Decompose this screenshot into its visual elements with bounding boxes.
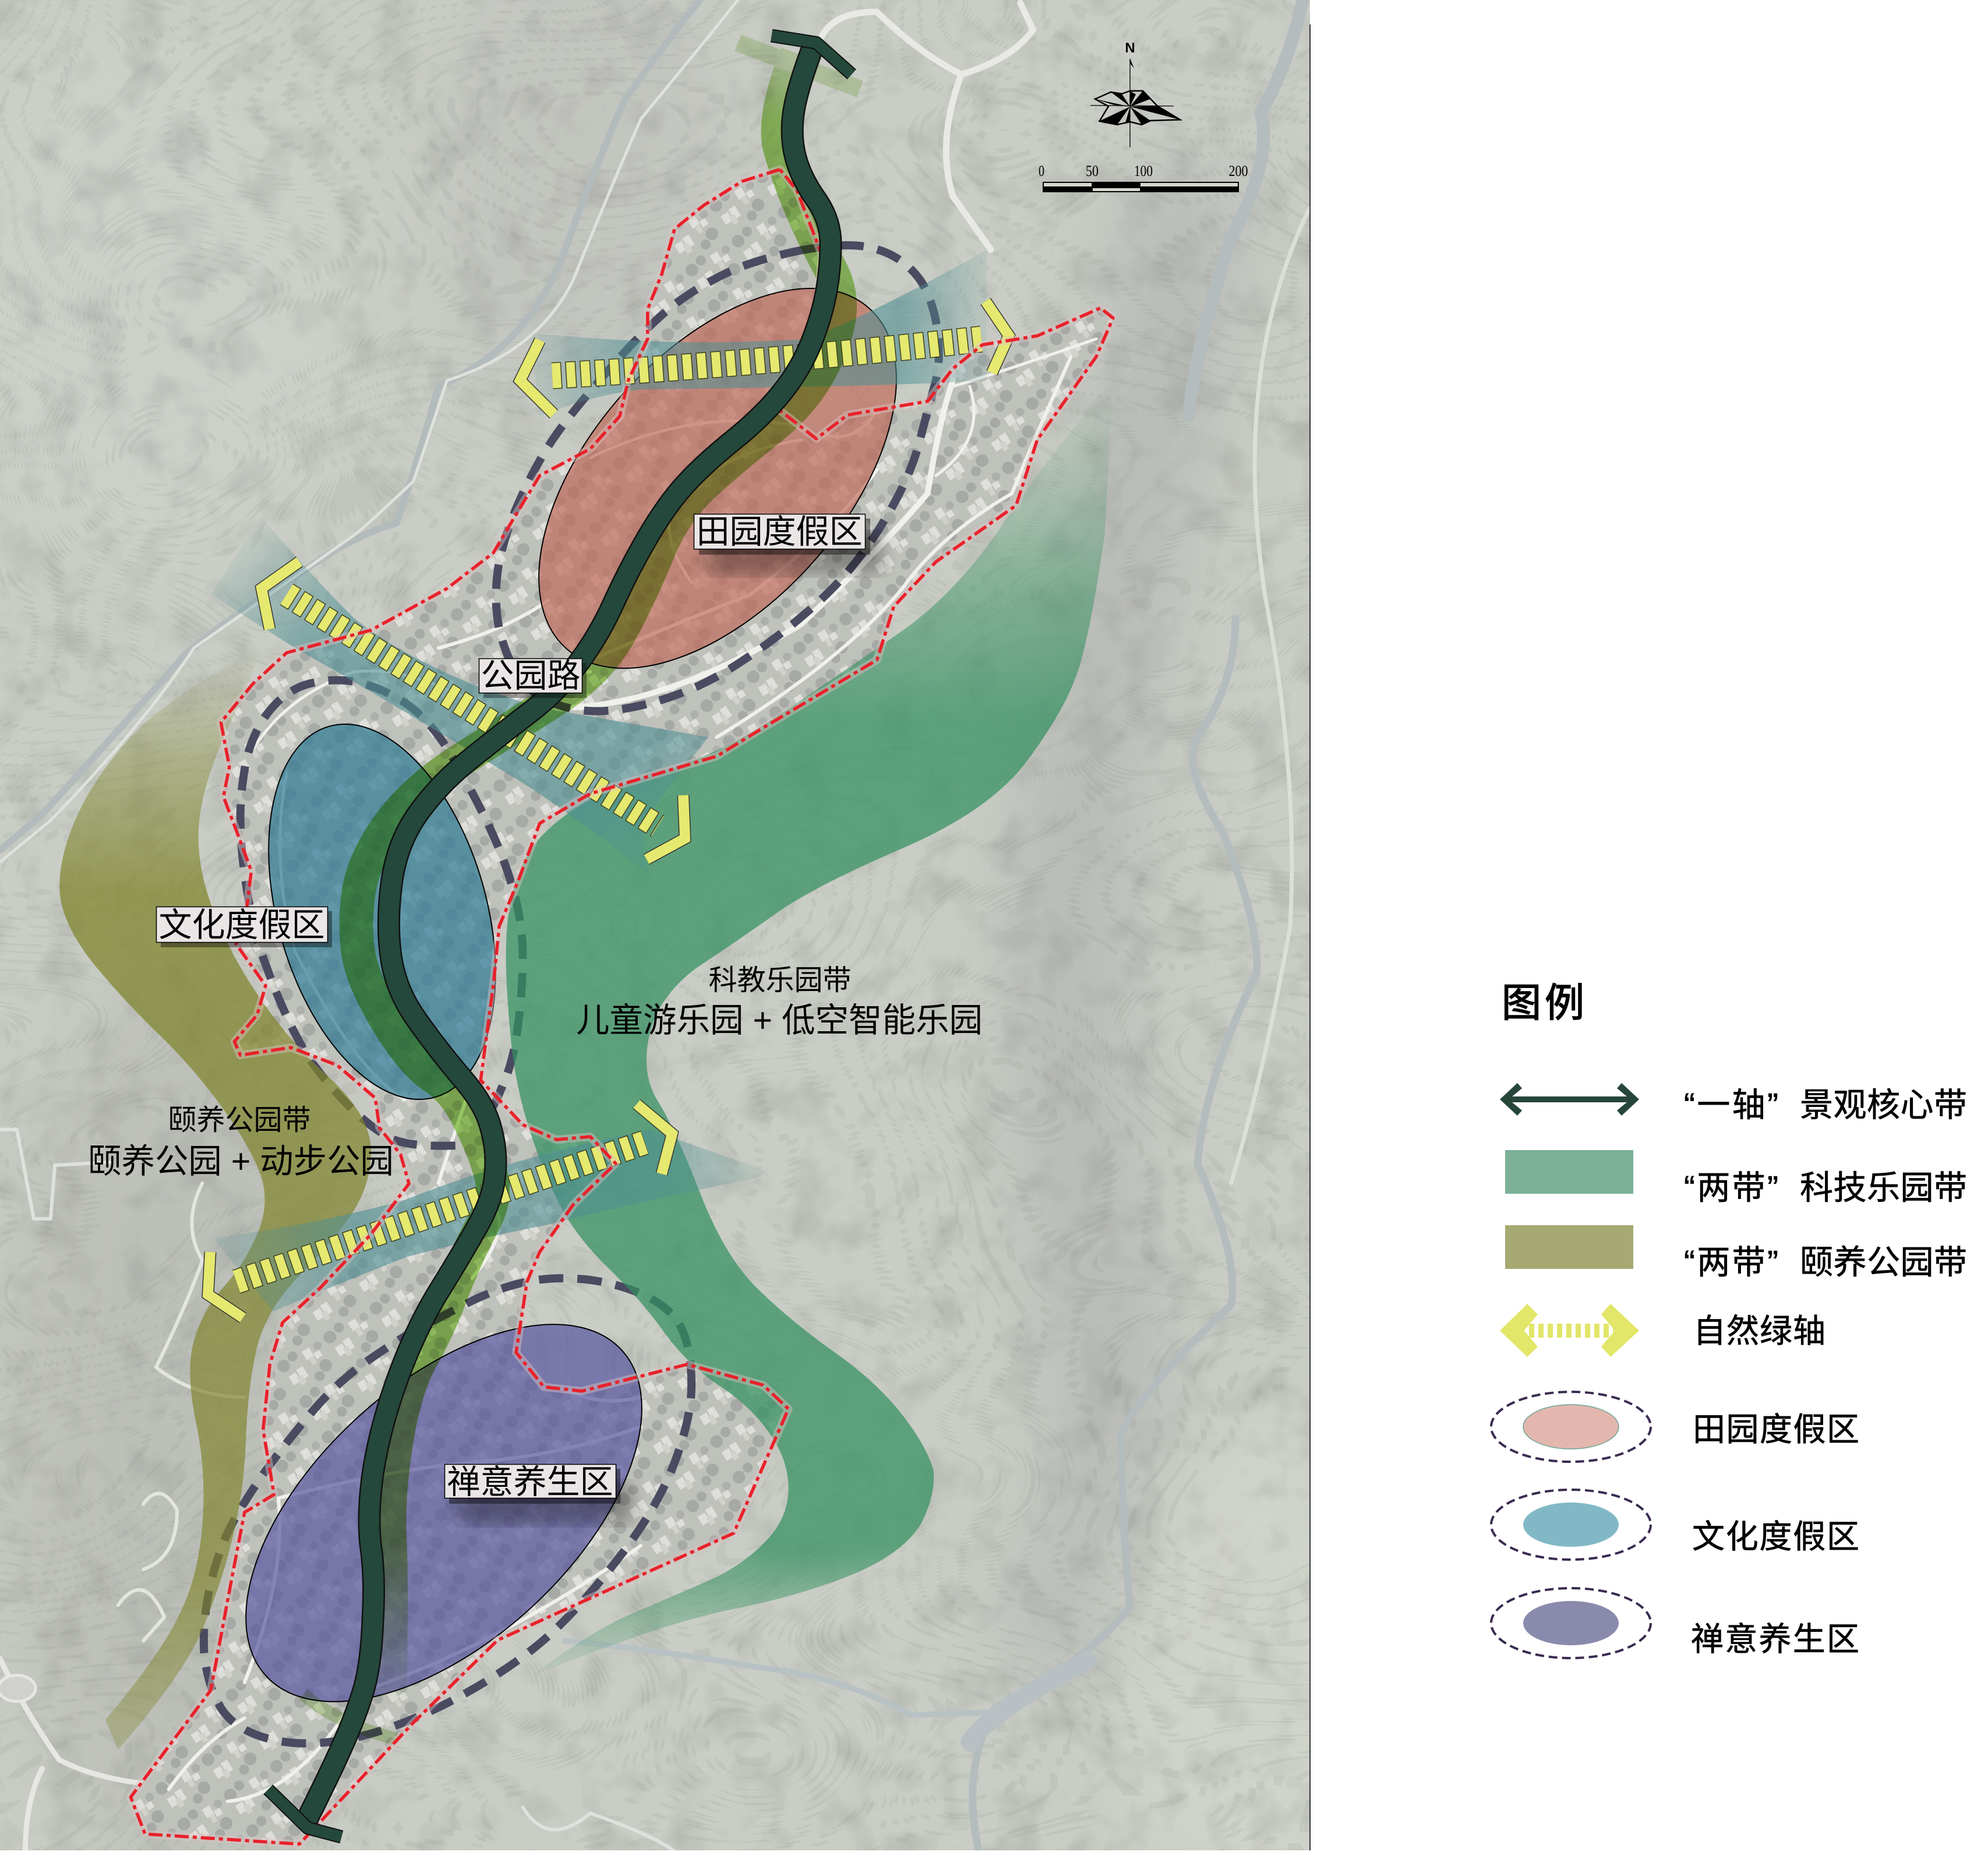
zone outline: culture resort [241,680,523,1146]
legend: axis label: “一轴” [1684,1087,1778,1124]
label: 禅意养生区: 禅意养生区 [447,1463,613,1501]
legend: axis arrow [1500,1083,1639,1116]
natural green axes: striped bars and chevrons [208,301,1009,1318]
text: science and education belt annotation [576,965,983,1039]
panel: base terrain map [0,0,1404,1855]
legend: science park label: 科技乐园带 [1800,1169,1967,1207]
legend: wellness park label: “两带” [1684,1244,1778,1281]
legend: pastoral resort icon [1491,1392,1651,1462]
label: 田园度假区: 田园度假区 [697,513,862,551]
ellipse: pastoral resort [471,224,964,733]
scale bar: 200 [1229,163,1248,179]
label: 田园度假区 [694,513,882,574]
green axis: north [520,301,1009,414]
legend: natural green axis icon [1500,1304,1639,1357]
legend title: 图例 [1502,981,1584,1025]
red site boundary [130,170,1113,1844]
teal cross corridors [211,250,987,1311]
scale bar: 0 [1039,163,1044,179]
dashed zone outlines [204,245,939,1743]
label: 公园路: 公园路 [481,657,580,694]
label: 禅意养生区 [445,1463,632,1524]
green axis: south [208,1104,672,1318]
legend: zen wellness icon [1491,1588,1651,1658]
scale bar: 50 [1086,163,1099,179]
legend: wellness park label [1684,1244,1967,1281]
legend: wellness park swatch [1505,1225,1633,1269]
legend: culture resort icon [1491,1490,1651,1560]
ellipse: zen wellness [179,1255,709,1771]
ellipse: culture resort [229,697,535,1126]
legend: science park swatch [1505,1150,1633,1194]
band: science and education park belt [506,380,1113,1677]
panel: legend [1491,981,1967,1658]
text: wellness belt annotation [88,1105,394,1180]
icon: north arrow and wind rose: N [1125,40,1135,56]
green corridor along the axis [303,43,860,1739]
text: wellness belt annotation: 颐养公园带 [168,1105,311,1136]
text: science and education belt annotation: 儿童游乐园 + 低空智能乐园 [576,1001,983,1039]
main landscape axis with arrowheads [268,36,852,1837]
green axis: middle [262,562,685,859]
zone outline: pastoral resort [496,245,939,711]
legend: science park label [1684,1169,1967,1207]
zone outline: zen wellness [204,1278,691,1743]
text: wellness belt annotation: 颐养公园 + 动步公园 [88,1142,394,1180]
legend: pastoral resort label: 田园度假区 [1693,1411,1859,1448]
legend: natural green axis label: 自然绿轴 [1693,1313,1825,1349]
legend: culture resort label: 文化度假区 [1692,1518,1859,1555]
rivers and outer roads [0,0,1309,1852]
icon: north arrow and wind rose [1090,40,1180,147]
label: 文化度假区: 文化度假区 [158,907,325,944]
band: wellness park belt [59,648,371,1750]
scale bar [1039,163,1248,192]
scale bar: 100 [1134,163,1153,179]
legend: axis label [1684,1087,1967,1124]
legend: wellness park label: 颐养公园带 [1800,1244,1967,1281]
legend: science park label: “两带” [1684,1169,1778,1207]
text: science and education belt annotation: 科教乐园带 [708,965,852,996]
map right edge line [1309,24,1311,1850]
legend: zen wellness label: 禅意养生区 [1691,1621,1859,1657]
legend: axis label: 景观核心带 [1800,1087,1967,1124]
panel: developed residential area [134,174,1113,1842]
